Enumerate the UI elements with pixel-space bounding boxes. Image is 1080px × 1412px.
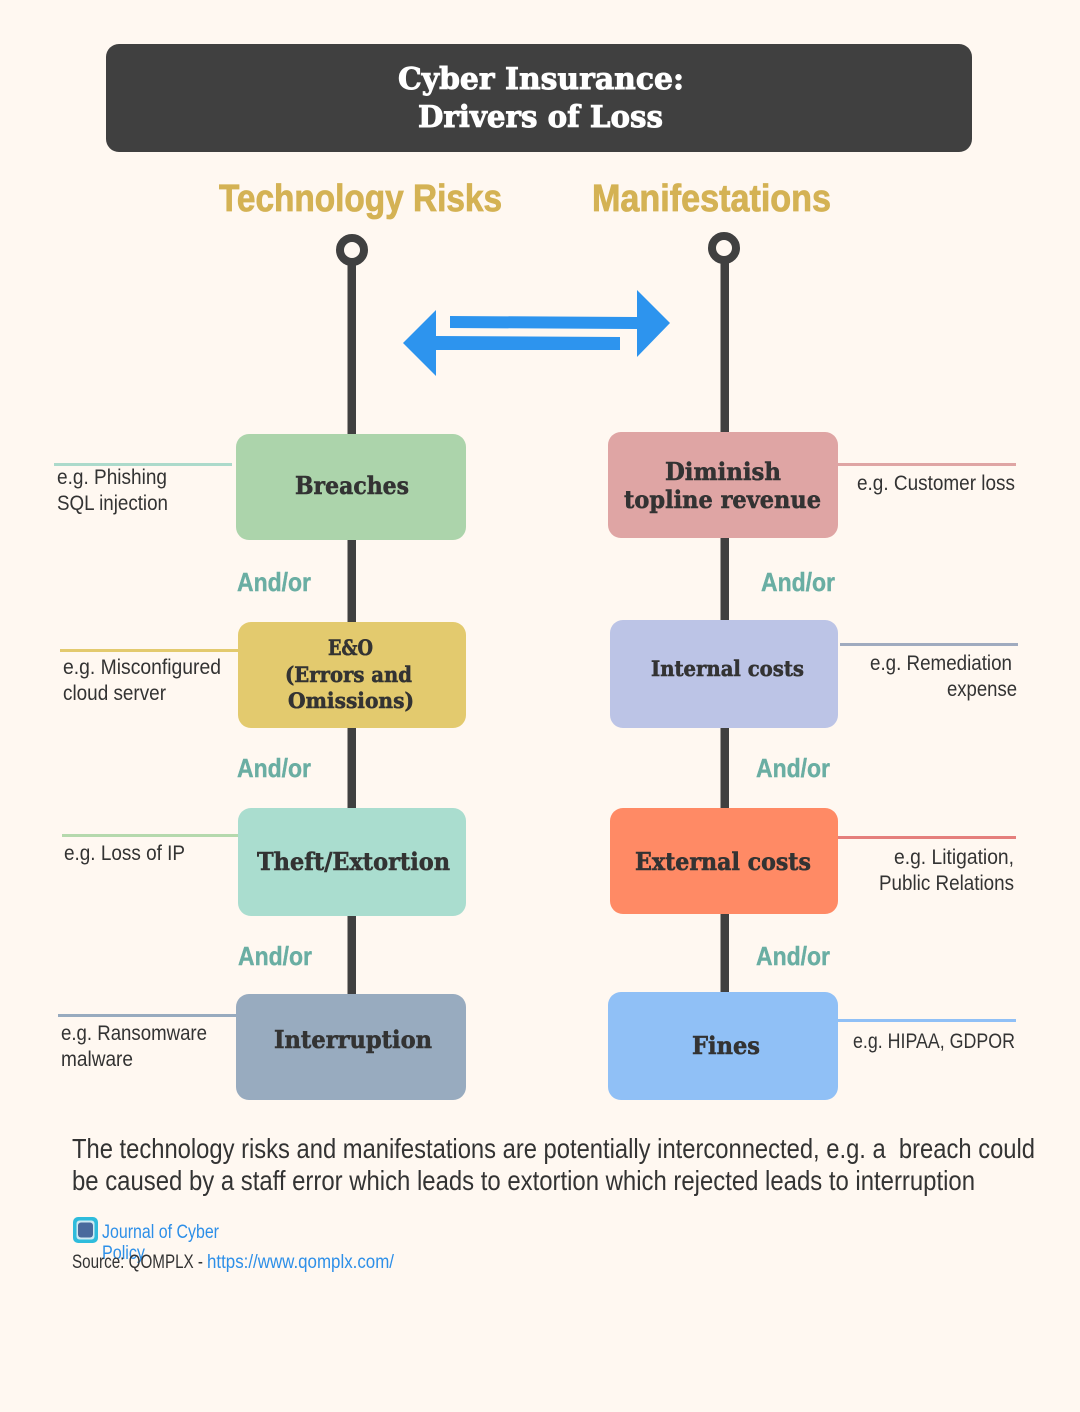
box: internal costs (610, 620, 838, 728)
box: diminish topline revenue: Diminish (665, 457, 781, 486)
box: breaches: Breaches (295, 471, 409, 500)
callout: interruption example: malware (61, 1047, 133, 1071)
heading: technology risks: Technology Risks (219, 178, 502, 220)
source line: Source: QOMPLX - (72, 1252, 203, 1273)
box: fines (608, 992, 838, 1100)
source line (72, 1252, 395, 1273)
title banner (106, 44, 972, 152)
title banner: Cyber Insurance: (398, 62, 684, 97)
box: errors and omissions (238, 622, 466, 728)
callout: internal costs example: expense (947, 677, 1017, 701)
box: external costs: External costs (635, 847, 811, 876)
callout: fines example (838, 1019, 1016, 1053)
label: and/or: And/or (756, 753, 830, 783)
callout: interruption example (58, 1014, 236, 1071)
callout: errors and omissions example: e.g. Misconfigured (63, 655, 221, 679)
callout: external costs example: e.g. Litigation, (894, 845, 1014, 869)
callout: breaches example: SQL injection (57, 491, 168, 515)
title banner: Drivers of Loss (418, 100, 663, 135)
callout: theft example (62, 834, 238, 865)
summary text (72, 1133, 1035, 1196)
box: fines: Fines (692, 1031, 760, 1060)
callout: interruption example: e.g. Ransomware (61, 1021, 207, 1045)
label: and/or: And/or (237, 753, 311, 783)
icon: journal logo (73, 1217, 98, 1243)
box: diminish topline revenue (608, 432, 838, 538)
box: theft/extortion (238, 808, 466, 916)
callout: breaches example: e.g. Phishing (57, 465, 167, 489)
box: internal costs: Internal costs (651, 656, 804, 681)
callout: revenue example: e.g. Customer loss (857, 471, 1015, 495)
box: interruption: Interruption (274, 1025, 432, 1054)
callout: breaches example (54, 463, 232, 515)
icon: two-way arrows (403, 290, 670, 376)
callout: external costs example: Public Relations (879, 871, 1014, 895)
callout: fines example: e.g. HIPAA, GDPOR (853, 1029, 1015, 1053)
box: errors and omissions: E&O (328, 635, 373, 660)
timeline spine: technology risks (340, 238, 364, 996)
box: diminish topline revenue: topline revenue (624, 485, 821, 514)
box: external costs (610, 808, 838, 914)
callout: revenue example (838, 463, 1016, 495)
source line: https://www.qomplx.com/ (207, 1252, 395, 1273)
label: and/or: And/or (238, 941, 312, 971)
link: journal of cyber policy: Policy (102, 1243, 145, 1264)
box: breaches (236, 434, 466, 540)
box: errors and omissions: Omissions) (288, 688, 414, 713)
label: and/or: And/or (756, 941, 830, 971)
timeline spine: manifestations (712, 236, 736, 994)
heading: manifestations: Manifestations (592, 178, 831, 220)
label: and/or: And/or (761, 567, 835, 597)
callout: external costs example (838, 836, 1016, 895)
callout: internal costs example (840, 643, 1018, 701)
box: interruption (236, 994, 466, 1100)
callout: internal costs example: e.g. Remediation (870, 651, 1012, 675)
box: errors and omissions: (Errors and (285, 662, 412, 687)
box: theft/extortion: Theft/Extortion (257, 847, 450, 876)
callout: errors and omissions example: cloud server (63, 681, 166, 705)
callout: theft example: e.g. Loss of IP (64, 841, 185, 865)
link: journal of cyber policy (102, 1222, 220, 1264)
link: journal of cyber policy: Journal of Cyber (102, 1222, 220, 1243)
callout: errors and omissions example (60, 649, 238, 705)
label: and/or: And/or (237, 567, 311, 597)
